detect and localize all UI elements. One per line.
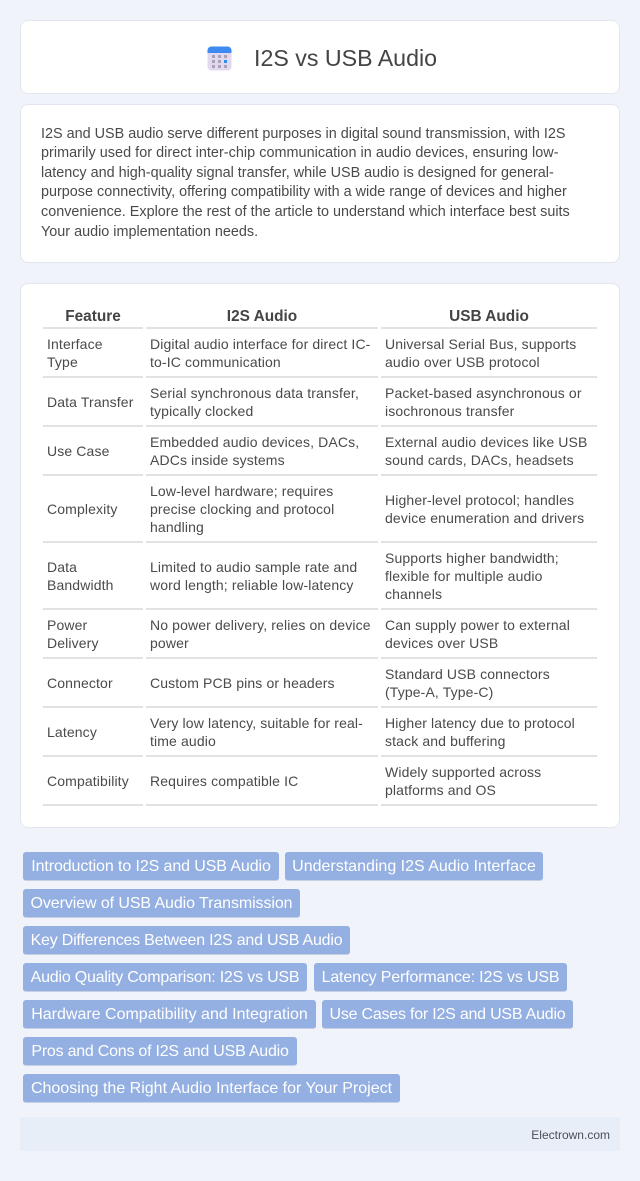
- tag: [23, 926, 350, 955]
- tag: Latency Performance: I2S vs USB: [322, 969, 559, 986]
- row: connector: Custom PCB pins or headers: [150, 675, 335, 691]
- row: data transfer: Data Transfer: [47, 394, 134, 410]
- row: power delivery: Power: [47, 617, 87, 633]
- tag: [23, 1037, 297, 1066]
- title: I2S vs USB Audio: [254, 44, 437, 70]
- row: connector: (Type-A, Type-C): [385, 684, 493, 700]
- row: interface type: Interface: [47, 336, 103, 352]
- row: compatibility: Compatibility: [47, 773, 129, 789]
- row: data bandwidth: Data: [47, 559, 77, 575]
- row: latency: stack and buffering: [385, 733, 506, 749]
- tag: [23, 889, 300, 918]
- table header: USB Audio: [449, 308, 529, 325]
- row: complexity: Higher-level protocol; handles: [385, 492, 574, 508]
- tag: Overview of USB Audio Transmission: [31, 895, 292, 912]
- tag: Audio Quality Comparison: I2S vs USB: [31, 969, 299, 986]
- tag: Use Cases for I2S and USB Audio: [330, 1006, 565, 1023]
- row: complexity: [47, 483, 584, 535]
- row: data bandwidth: flexible for multiple audio: [385, 568, 543, 584]
- text block: intro paragraph: [41, 126, 570, 240]
- footer: [20, 1117, 620, 1151]
- row: compatibility: Requires compatible IC: [150, 773, 298, 789]
- tag: [322, 1000, 573, 1029]
- row: latency: time audio: [150, 733, 216, 749]
- row: power delivery: Can supply power to external: [385, 617, 570, 633]
- tag: Pros and Cons of I2S and USB Audio: [31, 1043, 289, 1060]
- row: latency: [47, 715, 575, 749]
- row: data transfer: [47, 385, 582, 419]
- row: data bandwidth: channels: [385, 586, 442, 602]
- row: use case: External audio devices like USB: [385, 434, 587, 450]
- row: interface type: to-IC communication: [150, 354, 281, 370]
- text block: intro paragraph: convenience. Explore the rest of the article to understand which interface best suits: [41, 204, 570, 220]
- row: connector: [47, 666, 550, 700]
- row: use case: [47, 434, 587, 468]
- row: connector: Connector: [47, 675, 113, 691]
- row: connector: Standard USB connectors: [385, 666, 550, 682]
- row: power delivery: Delivery: [47, 635, 99, 651]
- row: interface type: Digital audio interface for direct IC-: [150, 336, 370, 352]
- row: complexity: Complexity: [47, 501, 118, 517]
- row: latency: Higher latency due to protocol: [385, 715, 575, 731]
- panel: comparison table: [20, 283, 620, 828]
- row: complexity: handling: [150, 519, 204, 535]
- text block: intro paragraph: primarily used for direct inter-chip communication in audio devices, ensuring low-: [41, 145, 559, 161]
- row: power delivery: devices over USB: [385, 635, 498, 651]
- row: data transfer: Serial synchronous data transfer,: [150, 385, 359, 401]
- tag: Introduction to I2S and USB Audio: [31, 858, 271, 875]
- text block: intro paragraph: latency and high-quality signal transfer, while USB audio is designed for general-: [41, 165, 554, 181]
- row: data transfer: typically clocked: [150, 403, 253, 419]
- row: data transfer: isochronous transfer: [385, 403, 514, 419]
- tag: Hardware Compatibility and Integration: [31, 1006, 308, 1023]
- text block: intro paragraph: purpose connectivity, offering compatibility with a wide range of devices and higher: [41, 184, 567, 200]
- row: compatibility: [47, 764, 541, 798]
- row: complexity: device enumeration and drivers: [385, 510, 584, 526]
- row: power delivery: [47, 617, 570, 651]
- row: compatibility: Widely supported across: [385, 764, 541, 780]
- row: data bandwidth: Limited to audio sample rate and: [150, 559, 357, 575]
- row: interface type: Type: [47, 354, 78, 370]
- table header: I2S Audio: [227, 308, 297, 325]
- row: use case: sound cards, DACs, headsets: [385, 452, 574, 468]
- tag: [23, 963, 307, 992]
- row: data bandwidth: [47, 550, 559, 602]
- table header: [65, 308, 529, 325]
- row: use case: Embedded audio devices, DACs,: [150, 434, 359, 450]
- tag: [23, 1074, 400, 1103]
- row: power delivery: power: [150, 635, 189, 651]
- row: power delivery: No power delivery, relies on device: [150, 617, 371, 633]
- tag: [285, 852, 543, 881]
- row: data bandwidth: Supports higher bandwidth;: [385, 550, 559, 566]
- row: compatibility: platforms and OS: [385, 782, 496, 798]
- tag: Key Differences Between I2S and USB Audio: [31, 932, 342, 949]
- panel: header: [20, 20, 620, 94]
- row: use case: ADCs inside systems: [150, 452, 285, 468]
- row: data transfer: Packet-based asynchronous or: [385, 385, 582, 401]
- row: use case: Use Case: [47, 443, 110, 459]
- tag: [23, 852, 279, 881]
- tag: Choosing the Right Audio Interface for Your Project: [31, 1080, 392, 1097]
- row: data bandwidth: Bandwidth: [47, 577, 114, 593]
- tag: Understanding I2S Audio Interface: [292, 858, 536, 875]
- row: complexity: precise clocking and protocol: [150, 501, 334, 517]
- panel: introduction: [20, 104, 620, 263]
- text block: intro paragraph: Your audio implementation needs.: [41, 224, 258, 240]
- row: latency: Very low latency, suitable for real-: [150, 715, 363, 731]
- row: complexity: Low-level hardware; requires: [150, 483, 333, 499]
- footer credit: Electrown.com: [531, 1128, 610, 1142]
- panel: topic tags: [23, 852, 573, 1103]
- tag: [314, 963, 567, 992]
- row: latency: Latency: [47, 724, 97, 740]
- text block: intro paragraph: I2S and USB audio serve different purposes in digital sound transmission, with I2S: [41, 126, 566, 142]
- row: interface type: audio over USB protocol: [385, 354, 540, 370]
- row: data bandwidth: word length; reliable low-latency: [150, 577, 354, 593]
- table header: Feature: [65, 308, 121, 325]
- row: interface type: Universal Serial Bus, supports: [385, 336, 576, 352]
- row: interface type: [47, 336, 576, 370]
- tag: [23, 1000, 316, 1029]
- icon: calendar grid: [208, 46, 232, 70]
